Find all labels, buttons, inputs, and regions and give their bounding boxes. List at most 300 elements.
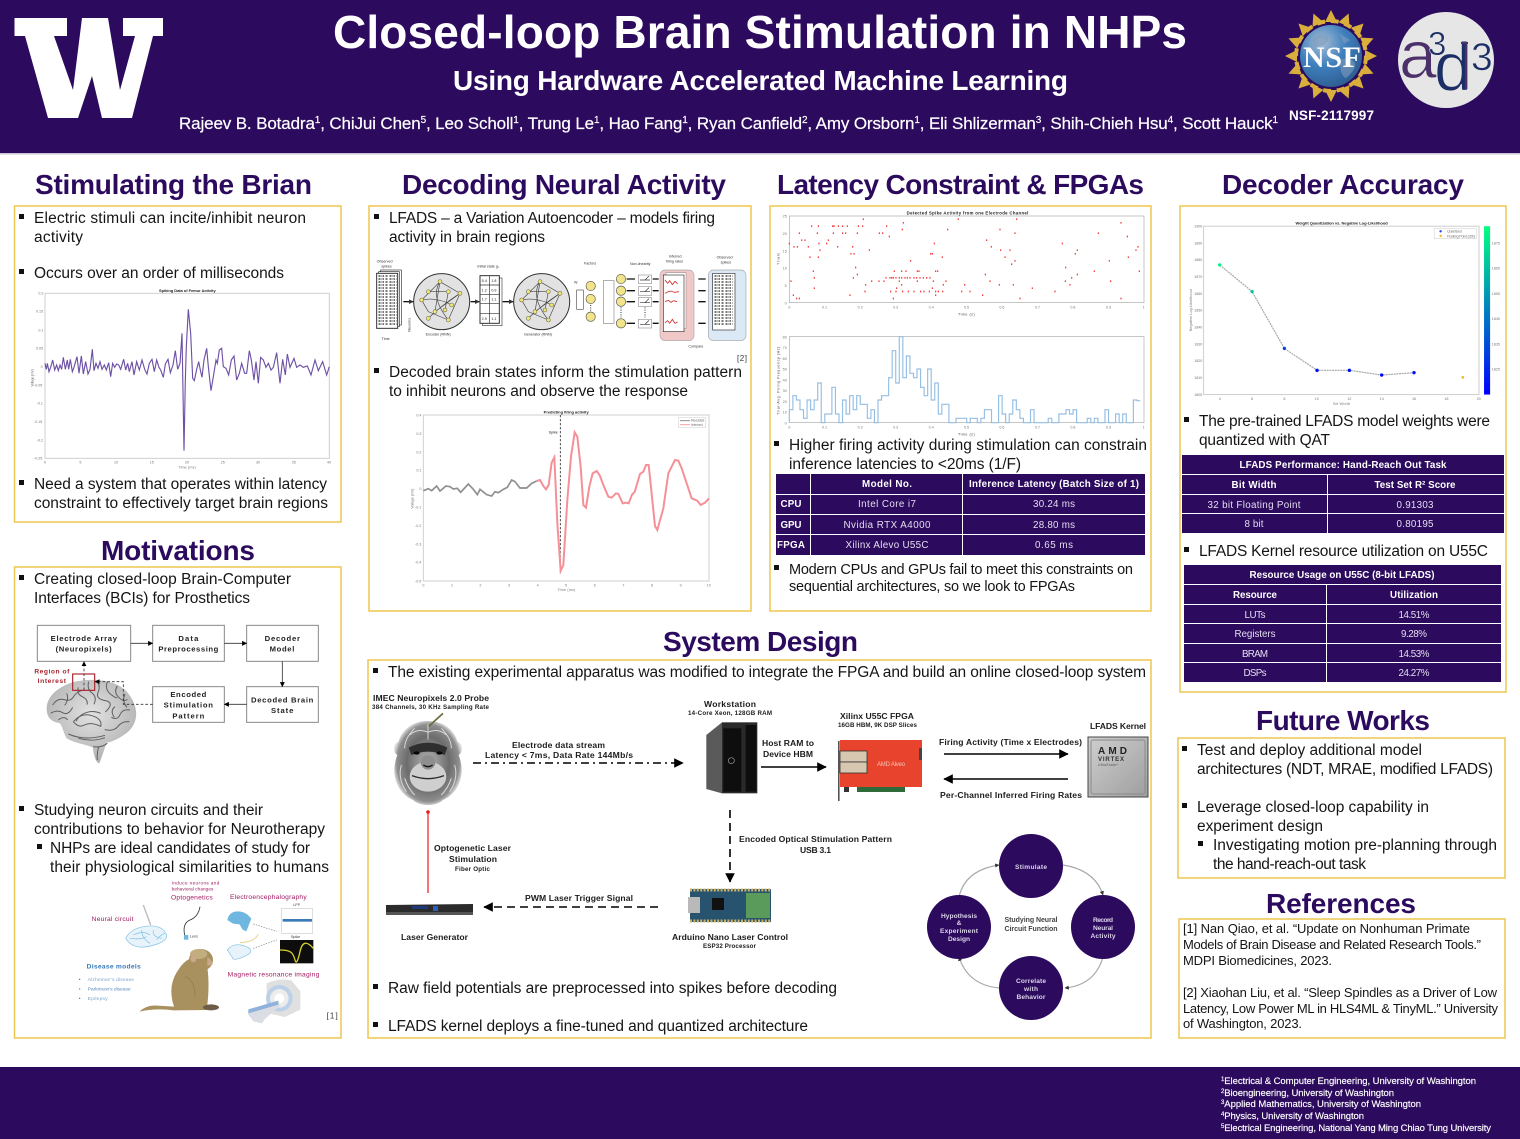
line chart: spiking data: 25 (221, 461, 225, 465)
line chart: spiking data: 0 (44, 461, 46, 465)
box: encoded stimulation pattern: Stimulation (164, 701, 213, 710)
line chart: predicting firing activity: 8 (651, 583, 653, 587)
raster plot: spike activity: 0.9 (1106, 305, 1111, 309)
header banner (0, 0, 1520, 154)
node: correlate with behavior: Correlate (1016, 978, 1046, 985)
figure: NHP research methods: Electroencephalography (230, 894, 307, 901)
reference 1: MDPI Biomedicines, 2023. (1183, 953, 1332, 968)
line chart: weight quantization: 16 (1412, 397, 1416, 401)
observed spikes input (377, 260, 412, 341)
line chart: spiking data: 0.2 (38, 292, 43, 296)
icon: rack laser (386, 904, 473, 915)
citation: [2] (737, 354, 747, 363)
node: LFADS kernel chip: LFADS Kernel (1090, 721, 1146, 731)
line chart: spiking data: 5 (79, 461, 81, 465)
table: inference latency: 0.65 ms (1035, 540, 1073, 551)
histogram: firing frequency: 10 (783, 411, 787, 415)
node: hypothesis and experiment design: & (957, 920, 962, 927)
authors: 3 (1036, 115, 1042, 126)
box: data preprocessing: Data (178, 634, 199, 643)
factors and rates layers: Non-linearity (630, 262, 651, 266)
table: inference latency: Model No. (862, 479, 912, 490)
box: decoder model (247, 625, 318, 661)
footer with affiliations: 3 (1221, 1100, 1225, 1106)
reference 2: [2] Xiaohan Liu, et al. “Sleep Spindles as a Driver of Low (1183, 985, 1498, 1000)
table: inference latency: CPU (780, 499, 802, 510)
authors: , Ryan Canfield (688, 114, 802, 133)
bullet text: electric stimuli: Electric stimuli can incite/inhibit neuron (34, 210, 306, 227)
bullet text: additional architectures: Test and deploy additional model (1197, 742, 1422, 759)
bullet text: electric stimuli: activity (34, 229, 83, 246)
line chart: predicting firing activity: -0.5 (415, 579, 421, 583)
line chart: predicting firing activity: 0.4 (416, 413, 421, 417)
line chart: spiking data: -0.15 (34, 420, 42, 424)
line chart: predicting firing activity: 2 (479, 583, 481, 587)
callout: region of interest: Region of (34, 669, 70, 676)
legend: Inferred (691, 423, 703, 427)
bullet text: apparatus: The existing experimental apparatus was modified to integrate the FPGA and build an online closed-loop system (388, 664, 1146, 681)
bullet text: experiment design: experiment design (1197, 818, 1323, 835)
bullet text: latency system: constraint to effectively target brain regions (34, 495, 328, 512)
line chart: spiking data: 15 (150, 461, 154, 465)
figure: NHP research methods: Magnetic resonance imaging (228, 972, 320, 979)
LFP trace: LFP (293, 903, 301, 907)
histogram: firing frequency: 0.9 (1106, 425, 1111, 429)
table: resource usage: 14.51% (1398, 610, 1430, 621)
line chart: predicting firing activity: -0.2 (415, 524, 421, 528)
bullet text: experiment design: Leverage closed-loop capability in (1197, 799, 1429, 816)
line chart: weight quantization: 10 (1315, 397, 1319, 401)
bullet text: neuron circuits (19, 802, 329, 876)
diagram: LFADS architecture (377, 254, 747, 363)
icon: university W logo (14, 18, 163, 118)
raster plot: spike activity: Detected Spike Activity from one Electrode Channel (907, 210, 1028, 215)
table: inference latency: Intel Core i7 (858, 499, 916, 510)
initial state table: 1.8 (491, 279, 496, 283)
colorbar: 1865 (1492, 267, 1500, 271)
bullet text: modern CPUs (774, 562, 1133, 595)
box: decoder model: Model (270, 645, 294, 654)
box: decoder model: Decoder (265, 634, 300, 643)
raster plot: spike activity: 25 (783, 215, 787, 219)
bullet text: additional architectures: architectures (NDT, MRAE, modified LFADS) (1197, 761, 1493, 778)
line chart: weight quantization: 1870 (1194, 275, 1202, 279)
initial state table: 0.9 (491, 288, 496, 292)
initial state table: 1.1 (491, 317, 496, 321)
observed spikes comparison: Compare (688, 345, 703, 349)
line chart: weight quantization: 1810 (1194, 376, 1202, 380)
reference 2: of Washington, 2023. (1183, 1016, 1302, 1031)
raster plot: spike activity: 15 (783, 249, 787, 253)
arrow: PWM laser trigger: PWM Laser Trigger Signal (525, 893, 633, 903)
raster plot: spike activity: 0.4 (929, 305, 934, 309)
table: resource usage: Resource Usage on U55C (8-bit LFADS) (1250, 570, 1434, 581)
citation: [1] (327, 1012, 338, 1021)
raster plot: spike activity: 0.6 (999, 305, 1004, 309)
table: resource usage: 14.53% (1398, 649, 1430, 660)
line chart: spiking data: 30 (256, 461, 260, 465)
table: LFADS performance: 8 bit (1244, 519, 1264, 530)
line chart: weight quantization (1189, 221, 1500, 406)
raster plot: spike activity: 0.1 (822, 305, 827, 309)
raster plot: spike activity: 1 (1143, 305, 1145, 309)
footer with affiliations: Bioengineering, University of Washington (1224, 1088, 1394, 1099)
footer with affiliations: Electrical Engineering, National Yang Ming Chiao Tung University (1224, 1123, 1491, 1134)
heading: System Design (663, 626, 858, 657)
footer with affiliations: 2 (1221, 1089, 1225, 1095)
authors: 1 (513, 115, 519, 126)
bullet text: latency system (19, 476, 328, 512)
line chart: spiking data: 0 (41, 365, 43, 369)
heading: Motivations (101, 535, 255, 566)
LFP trace (282, 903, 313, 933)
icon: NSF logo: NSF (1303, 41, 1361, 74)
line chart: predicting firing activity: 0 (419, 487, 421, 491)
footer with affiliations: Electrical & Computer Engineering, University of Washington (1224, 1076, 1476, 1087)
bullet text: modern CPUs: Modern CPUs and GPUs fail to meet this constraints on (789, 562, 1133, 578)
reference 2: Latency, Low Power ML in HLS4ML & TinyML.” University (1183, 1001, 1498, 1016)
bullet text: experiment design: the hand-reach-out task (1213, 856, 1366, 873)
table: resource usage: Registers (1234, 629, 1276, 640)
line chart: weight quantization: 8 (1283, 397, 1285, 401)
arrow: host RAM to device HBM: Host RAM to (762, 738, 814, 748)
arrow: host RAM to device HBM (761, 738, 826, 767)
authors: 1 (914, 115, 920, 126)
line chart: weight quantization: 1820 (1194, 359, 1202, 363)
arrow: optogenetic laser stimulation: Stimulation (449, 854, 497, 864)
line chart: spiking data: -0.1 (37, 402, 43, 406)
line chart: weight quantization: 6 (1251, 397, 1253, 401)
raster plot: spike activity: 0.8 (1070, 305, 1075, 309)
line chart: weight quantization: 1860 (1194, 292, 1202, 296)
node: hypothesis and experiment design: Experiment (940, 928, 979, 935)
bullet text: experiment design: Investigating motion pre-planning through (1213, 837, 1497, 854)
table: inference latency: 30.24 ms (1033, 499, 1075, 510)
raster plot: spike activity: Trials (776, 253, 780, 265)
table: inference latency: FPGA (777, 540, 805, 551)
box: data preprocessing (153, 625, 224, 661)
node: FPGA card: 16GB HBM, 9K DSP Slices (838, 722, 918, 729)
bullet text: closed-loop BCIs (19, 571, 291, 607)
node: record neural activity: Neural (1093, 925, 1113, 932)
authors: 4 (1168, 115, 1174, 126)
table: inference latency: GPU (780, 520, 802, 531)
node: workstation (688, 699, 772, 793)
line chart: spiking data: -0.25 (34, 457, 42, 461)
disease models list: Alzheimer's disease (88, 977, 134, 983)
bullet text: decoded brain states: Decoded brain states inform the stimulation pattern (389, 364, 742, 381)
histogram: firing frequency: 0.2 (858, 425, 863, 429)
panel: Motivations (14, 535, 341, 1038)
subtitle: Using Hardware Accelerated Machine Learning (453, 65, 1068, 96)
bullet text: resource utilization: LFADS Kernel resource utilization on U55C (1199, 543, 1488, 560)
node: FPGA card (838, 711, 922, 801)
line chart: weight quantization: Bit Width (1333, 402, 1350, 406)
table: LFADS performance: 0.91303 (1396, 500, 1434, 511)
initial state table: 1.1 (491, 298, 496, 302)
icon: A3D3 logo: 3 (1428, 25, 1446, 62)
factors and rates layers (574, 261, 652, 328)
reference 1 (1183, 921, 1481, 968)
histogram: firing frequency: 0.7 (1035, 425, 1040, 429)
node: LFADS kernel chip: UltraScale+ (1098, 763, 1118, 767)
optogenetic fibre: Lens (190, 935, 198, 939)
observed spikes comparison: Observed (717, 256, 733, 260)
icon: tower PC (706, 722, 757, 793)
line chart: weight quantization: 1830 (1194, 342, 1202, 346)
line chart: predicting firing activity: 7 (622, 583, 624, 587)
node: LFADS kernel chip: AMD (1098, 746, 1127, 757)
heading: References (1266, 888, 1416, 919)
disease models list (79, 964, 141, 1002)
bullet text: LFADS: LFADS – a Variation Autoencoder – models firing (389, 210, 715, 227)
connecting arrows (403, 279, 706, 323)
line chart: spiking data: Time (ms) (178, 466, 196, 470)
line chart: predicting firing activity: 5 (565, 583, 567, 587)
footer with affiliations: 1 (1221, 1077, 1225, 1083)
node: laser generator: Laser Generator (401, 932, 469, 942)
box: encoded stimulation pattern: Encoded (170, 690, 207, 699)
raster plot: spike activity: Time (s) (958, 313, 975, 317)
table: inference latency: Inference Latency (Batch Size of 1) (969, 479, 1139, 490)
line chart: spiking data: 0.1 (38, 328, 43, 332)
histogram: firing frequency: Trial-Avg. Firing Frequency (Hz) (776, 347, 780, 415)
line chart: spiking data: -0.2 (37, 438, 43, 442)
line chart: predicting firing activity: 1 (451, 583, 453, 587)
bullet text: QAT (1184, 413, 1490, 449)
bullet text: LFADS kernel: LFADS kernel deploys a fine-tuned and quantized architecture (388, 1018, 808, 1035)
line chart: predicting firing activity: 4 (537, 583, 539, 587)
box: decoded brain state: State (271, 706, 293, 715)
line chart: weight quantization: 1900 (1194, 225, 1202, 229)
line chart: spiking data: 0.15 (36, 310, 43, 314)
table: LFADS performance (1182, 455, 1504, 533)
icon: FPGA card: AMD Alveo (877, 762, 906, 768)
arrows: loop connections (84, 643, 282, 704)
node: correlate with behavior: with (1023, 986, 1038, 993)
line chart: weight quantization: Weight Quantization vs. Negative Log-Likelihood (1295, 221, 1388, 226)
box: electrode array: (Neuropixels) (56, 645, 112, 654)
bullet text: firing activity: inference latencies to <20ms (1/F) (789, 456, 1021, 473)
legend: Quantized (1447, 230, 1462, 234)
colorbar (1484, 226, 1500, 395)
figure: NHP research methods (79, 881, 338, 1023)
histogram: firing frequency: 0.1 (822, 425, 827, 429)
MRI scanner (248, 979, 300, 1023)
legend: Floating Point (32b) (1447, 234, 1475, 238)
node: LFADS kernel chip (1088, 721, 1148, 797)
histogram: firing frequency: 0.4 (929, 425, 934, 429)
line chart: spiking data: 10 (114, 461, 118, 465)
bullet text: neuron circuits: Studying neuron circuits and their (34, 802, 263, 819)
authors: Rajeev B. Botadra (179, 114, 315, 133)
histogram: firing frequency: 0.3 (893, 425, 898, 429)
line chart: predicting firing activity: 0.2 (416, 450, 421, 454)
node: neuropixels probe: IMEC Neuropixels 2.0 Probe (373, 693, 489, 703)
node: arduino: Arduino Nano Laser Control (672, 932, 788, 942)
line chart: weight quantization: 1800 (1194, 393, 1202, 397)
histogram: firing frequency: 20 (783, 400, 787, 404)
bullet text: LFADS (374, 210, 715, 246)
disease models list: Parkinson's disease (88, 987, 131, 993)
histogram: firing frequency: Time (s) (958, 433, 975, 437)
line chart: predicting firing activity: 0.1 (416, 469, 421, 473)
line chart: weight quantization: Negative Log-Likelihood (1189, 289, 1193, 331)
table: inference latency: Nvidia RTX A4000 (844, 520, 931, 531)
bullet text: electric stimuli (19, 210, 306, 246)
line chart: spiking data: Voltage (mV) (30, 369, 34, 387)
table: resource usage: 24.27% (1398, 668, 1430, 679)
raster plot: spike activity (776, 210, 1145, 317)
bullet text: milliseconds: Occurs over an order of milliseconds (34, 265, 284, 282)
histogram: firing frequency (776, 335, 1145, 437)
arrow: electrode data stream (473, 740, 683, 763)
initial state table: 2.9 (482, 317, 487, 321)
bullet text: latency system: Need a system that operates within latency (34, 476, 327, 493)
node: record neural activity: Activity (1090, 933, 1116, 940)
inferred rates: Inferred (669, 254, 682, 258)
observed spikes input: Observed (377, 260, 393, 264)
node: workstation: 14-Core Xeon, 128GB RAM (688, 710, 772, 717)
line chart: weight quantization: 1890 (1194, 241, 1202, 245)
node: FPGA card: Xilinx U55C FPGA (840, 711, 914, 721)
authors: 1 (682, 115, 688, 126)
disease models list: Disease models (87, 964, 141, 971)
panel: Future Works (1178, 705, 1505, 878)
bullet text: decoded brain states (374, 364, 742, 400)
bullet text: QAT: The pre-trained LFADS model weights were (1199, 413, 1490, 430)
observed spikes comparison (688, 256, 746, 349)
panel: System Design (368, 626, 1151, 1038)
arrows: firing activity and rates: Per-Channel Inferred Firing Rates (940, 790, 1082, 800)
bullet text: firing activity (774, 437, 1147, 473)
observed spikes input: spikes (381, 265, 392, 269)
figure: NHP research methods: Induce neurons and (172, 881, 220, 886)
legend (1434, 229, 1476, 239)
panel: Decoder Accuracy (1180, 169, 1506, 692)
panel: Latency Constraint & FPGAs (770, 169, 1151, 611)
node: hypothesis and experiment design: Design (948, 936, 970, 943)
table: resource usage: 9.28% (1401, 629, 1427, 640)
icon: A3D3 logo: d (1434, 29, 1472, 105)
node: LFADS kernel chip: VIRTEX (1098, 757, 1124, 763)
node: stimulate: Stimulate (1015, 864, 1047, 871)
node: hypothesis and experiment design: Hypothesis (941, 913, 977, 920)
node: record neural activity: Record (1093, 917, 1113, 924)
authors: , Hao Fang (599, 114, 682, 133)
figure: NHP research methods: Neural circuit (92, 916, 133, 923)
spike oscilloscope (280, 935, 313, 963)
box: decoded brain state (247, 687, 318, 722)
cycle centre label: Studying Neural (1004, 917, 1058, 924)
node: record neural activity (1071, 895, 1135, 959)
node: arduino (672, 889, 788, 950)
box: data preprocessing: Preprocessing (158, 645, 219, 654)
line chart: weight quantization: 1840 (1194, 326, 1202, 330)
bullet text: decoded brain states: to inhibit neurons and observe the response (389, 383, 688, 400)
line chart: spiking data (30, 288, 331, 470)
flow diagram: closed-loop BCI (34, 625, 318, 763)
raster plot: spike activity: 0.5 (964, 305, 969, 309)
footer with affiliations: Applied Mathematics, University of Washington (1224, 1099, 1421, 1110)
line chart: predicting firing activity: 6 (594, 583, 596, 587)
line chart: predicting firing activity: -0.3 (415, 542, 421, 546)
colorbar: 1835 (1492, 342, 1500, 346)
node: correlate with behavior (999, 956, 1063, 1020)
raster plot: spike activity: 0.2 (858, 305, 863, 309)
panel: Decoding Neural Activity (369, 169, 751, 611)
legend (678, 418, 706, 427)
line chart: predicting firing activity: 0 (422, 583, 424, 587)
authors: , Leo Scholl (426, 114, 513, 133)
bullet text: additional architectures (1182, 742, 1493, 778)
arrow: optogenetic laser stimulation: Optogenetic Laser (434, 843, 512, 853)
line chart: weight quantization: 1880 (1194, 258, 1202, 262)
bullet text: neuron circuits: NHPs are ideal candidates of study for (50, 840, 310, 857)
authors: , Scott Hauck (1173, 114, 1273, 133)
table: resource usage: LUTs (1244, 610, 1266, 621)
reference 1: Models of Brain Disease and Related Research Tools.” (1183, 937, 1481, 952)
raster plot: spike activity: 10 (783, 267, 787, 271)
line chart: predicting firing activity: 9 (680, 583, 682, 587)
histogram: firing frequency: 0 (785, 421, 787, 425)
authors: , Amy Orsborn (807, 114, 914, 133)
factors and rates layers: W (574, 280, 578, 284)
line chart: spiking data: 20 (185, 461, 189, 465)
line chart: spiking data: 35 (292, 461, 296, 465)
table: LFADS performance: 0.80195 (1396, 519, 1434, 530)
heading: Stimulating the Brian (35, 169, 312, 200)
heading: Decoder Accuracy (1222, 169, 1464, 200)
reference 1: [1] Nan Qiao, et al. “Update on Nonhuman Primate (1183, 921, 1470, 936)
bullet text: LFADS: activity in brain regions (389, 229, 545, 246)
histogram: firing frequency: 1 (1143, 425, 1145, 429)
histogram: firing frequency: 70 (783, 346, 787, 350)
initial state table: 1.7 (482, 298, 487, 302)
raster plot: spike activity: 0 (788, 305, 790, 309)
line chart: predicting firing activity: 0.3 (416, 432, 421, 436)
inferred rates: firing rates (666, 259, 683, 263)
table: inference latency: 28.80 ms (1033, 520, 1075, 531)
table: inference latency (776, 474, 1145, 555)
bullet text: experiment design (1182, 799, 1497, 873)
node: neuropixels probe (372, 693, 490, 805)
arrow: encoded optical stimulation: USB 3.1 (800, 845, 831, 855)
table: LFADS performance: 32 bit Floating Point (1208, 500, 1301, 511)
authors: 1 (315, 115, 321, 126)
table: LFADS performance: LFADS Performance: Hand-Reach Out Task (1240, 460, 1447, 471)
table: LFADS performance: Test Set R² Score (1374, 480, 1456, 491)
bullet text: neuron circuits: their physiological similarities to humans (50, 859, 329, 876)
footer with affiliations: 5 (1221, 1124, 1225, 1130)
authors: , ChiJui Chen (320, 114, 421, 133)
line chart: weight quantization: 1850 (1194, 309, 1202, 313)
icon: NSF logo (1285, 10, 1377, 102)
initial state table: Initial state g₀ (477, 264, 500, 268)
arrow: optogenetic laser stimulation: Fiber Optic (455, 866, 491, 873)
inferred rates (660, 254, 694, 341)
table: resource usage: BRAM (1242, 649, 1268, 660)
authors: 1 (594, 115, 600, 126)
generator RNN: Generator (RNN) (524, 332, 552, 336)
panel: References (1179, 888, 1505, 1038)
node: hypothesis and experiment design (927, 895, 991, 959)
line chart: predicting firing activity: -0.4 (415, 561, 421, 565)
box: encoded stimulation pattern: Pattern (172, 711, 205, 720)
bullet text: modern CPUs: sequential architectures, so we look to FPGAs (789, 579, 1075, 595)
bullet text: closed-loop BCIs: Creating closed-loop Brain-Computer (34, 571, 291, 588)
histogram: firing frequency: 0.6 (999, 425, 1004, 429)
